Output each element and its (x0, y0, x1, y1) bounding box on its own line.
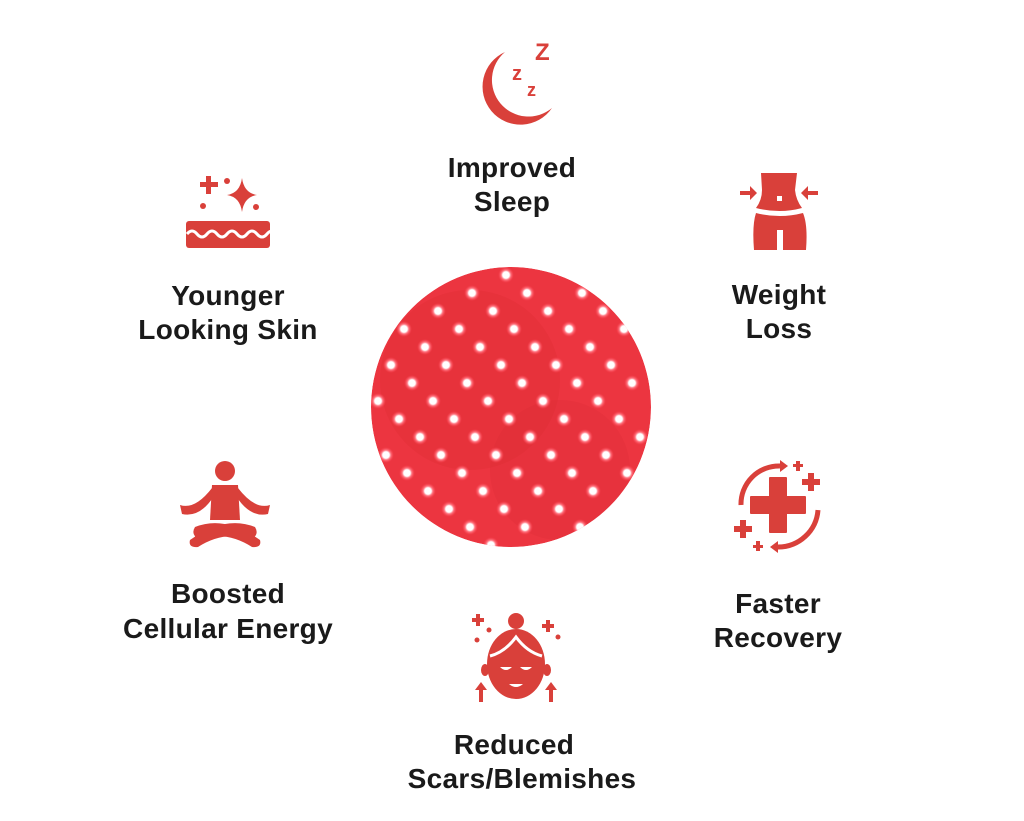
item: improved sleep (448, 39, 576, 217)
icon: waist (740, 173, 818, 250)
item: weight loss: Weight (732, 279, 826, 310)
icon: skin layer with sparkles (186, 176, 277, 248)
icon: meditation (180, 461, 270, 547)
item: reduced scars: Reduced (454, 729, 574, 760)
item: younger looking skin: Younger (171, 280, 285, 311)
item: faster recovery: Recovery (714, 622, 842, 653)
item: weight loss (732, 173, 826, 344)
icon: moon (483, 39, 552, 125)
item: boosted cellular energy: Boosted (171, 578, 285, 609)
item: faster recovery (714, 460, 842, 653)
item: reduced scars: Scars/Blemishes (408, 763, 636, 794)
icon: cross with arrows (734, 460, 820, 553)
item: improved sleep: Improved (448, 152, 576, 183)
icon: face (472, 613, 560, 702)
item: boosted cellular energy: Cellular Energy (123, 613, 333, 644)
item: younger looking skin: Looking Skin (138, 314, 318, 345)
icon: moon: z (527, 80, 536, 100)
item: improved sleep: Sleep (474, 186, 550, 217)
icon: moon: Z (535, 39, 550, 66)
item: boosted cellular energy (123, 461, 333, 644)
item: weight loss: Loss (746, 313, 812, 344)
icon: moon: z (512, 63, 522, 85)
center image: red light panel (370, 267, 651, 553)
item: reduced scars (408, 613, 636, 794)
item: faster recovery: Faster (735, 588, 821, 619)
item: younger looking skin (138, 176, 318, 345)
